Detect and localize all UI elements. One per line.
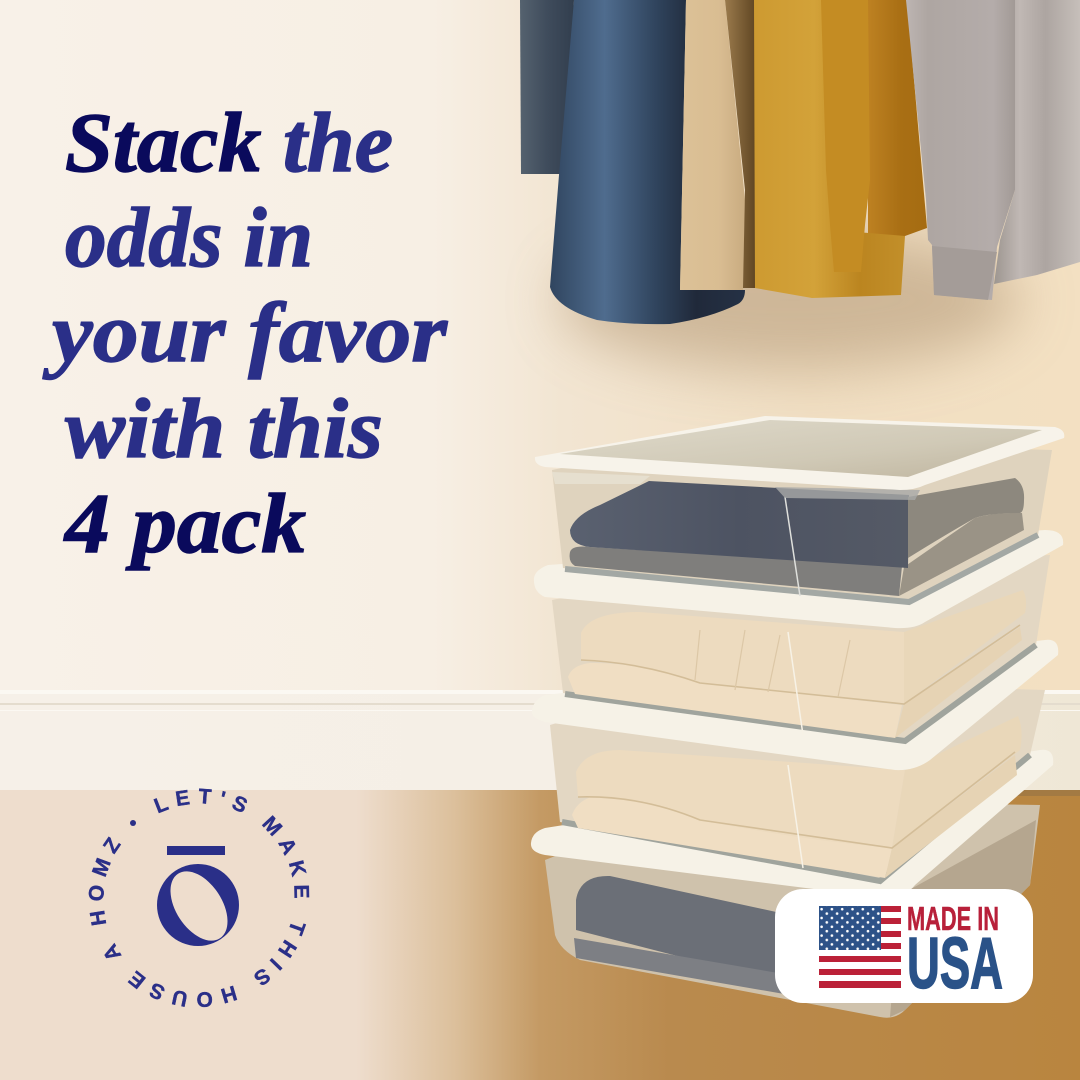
upper knit side (892, 716, 1022, 848)
top storage box with dark folded clothes (552, 440, 1052, 603)
third storage box with cream knits (550, 680, 1045, 882)
headline line 1: Stack the (65, 96, 393, 190)
top lid (535, 416, 1064, 490)
lower knit side (885, 755, 1017, 878)
second lid (534, 530, 1063, 628)
lower knit front (568, 663, 902, 738)
third lid (532, 640, 1058, 770)
brown fold (725, 0, 756, 288)
mustard sleeve with cuff (821, 0, 870, 272)
round brand logo (88, 788, 310, 1008)
made in USA badge (775, 889, 1033, 1004)
upper knit front (576, 750, 905, 848)
slogan dot (130, 820, 136, 826)
lower knit side (895, 627, 1022, 738)
beige garment (680, 0, 745, 290)
dark folded layer side (908, 478, 1024, 558)
USA text: USA (907, 924, 1003, 1004)
upper knit side (904, 590, 1026, 704)
made in text: MADE IN (907, 900, 999, 937)
headline line 3: your favor (42, 286, 448, 380)
tray edge (562, 755, 1030, 881)
lower knit front (572, 795, 892, 878)
headline line 5: 4 pack (63, 477, 306, 571)
grey folded layer front (570, 547, 902, 596)
second storage box with cream knits (552, 555, 1050, 742)
american flag (819, 906, 901, 988)
fourth lid (531, 750, 1053, 898)
back grey garment (994, 0, 1080, 284)
headline line 4: with this (65, 382, 383, 476)
headline (42, 96, 448, 571)
tray edge (565, 535, 1038, 602)
back mustard garment (868, 0, 927, 236)
logo bar (167, 846, 225, 855)
circular slogan: LET'S MAKE THIS HOUSE A HOMZ (88, 788, 310, 1008)
hanging clothes (520, 0, 1080, 324)
upper knit front (581, 612, 904, 704)
logo ring mark (157, 861, 239, 951)
bottom storage box with folded clothes (545, 800, 1040, 1018)
grey folded layer side (899, 513, 1024, 596)
dark folded layer front (570, 481, 909, 568)
grey sweater with cuff (906, 0, 1015, 300)
navy dress (550, 0, 745, 324)
badge background (775, 889, 1033, 1003)
mustard front garment (754, 0, 905, 298)
tray edge (565, 645, 1036, 741)
navy sleeve (520, 0, 574, 174)
headline line 2: odds in (65, 191, 313, 285)
